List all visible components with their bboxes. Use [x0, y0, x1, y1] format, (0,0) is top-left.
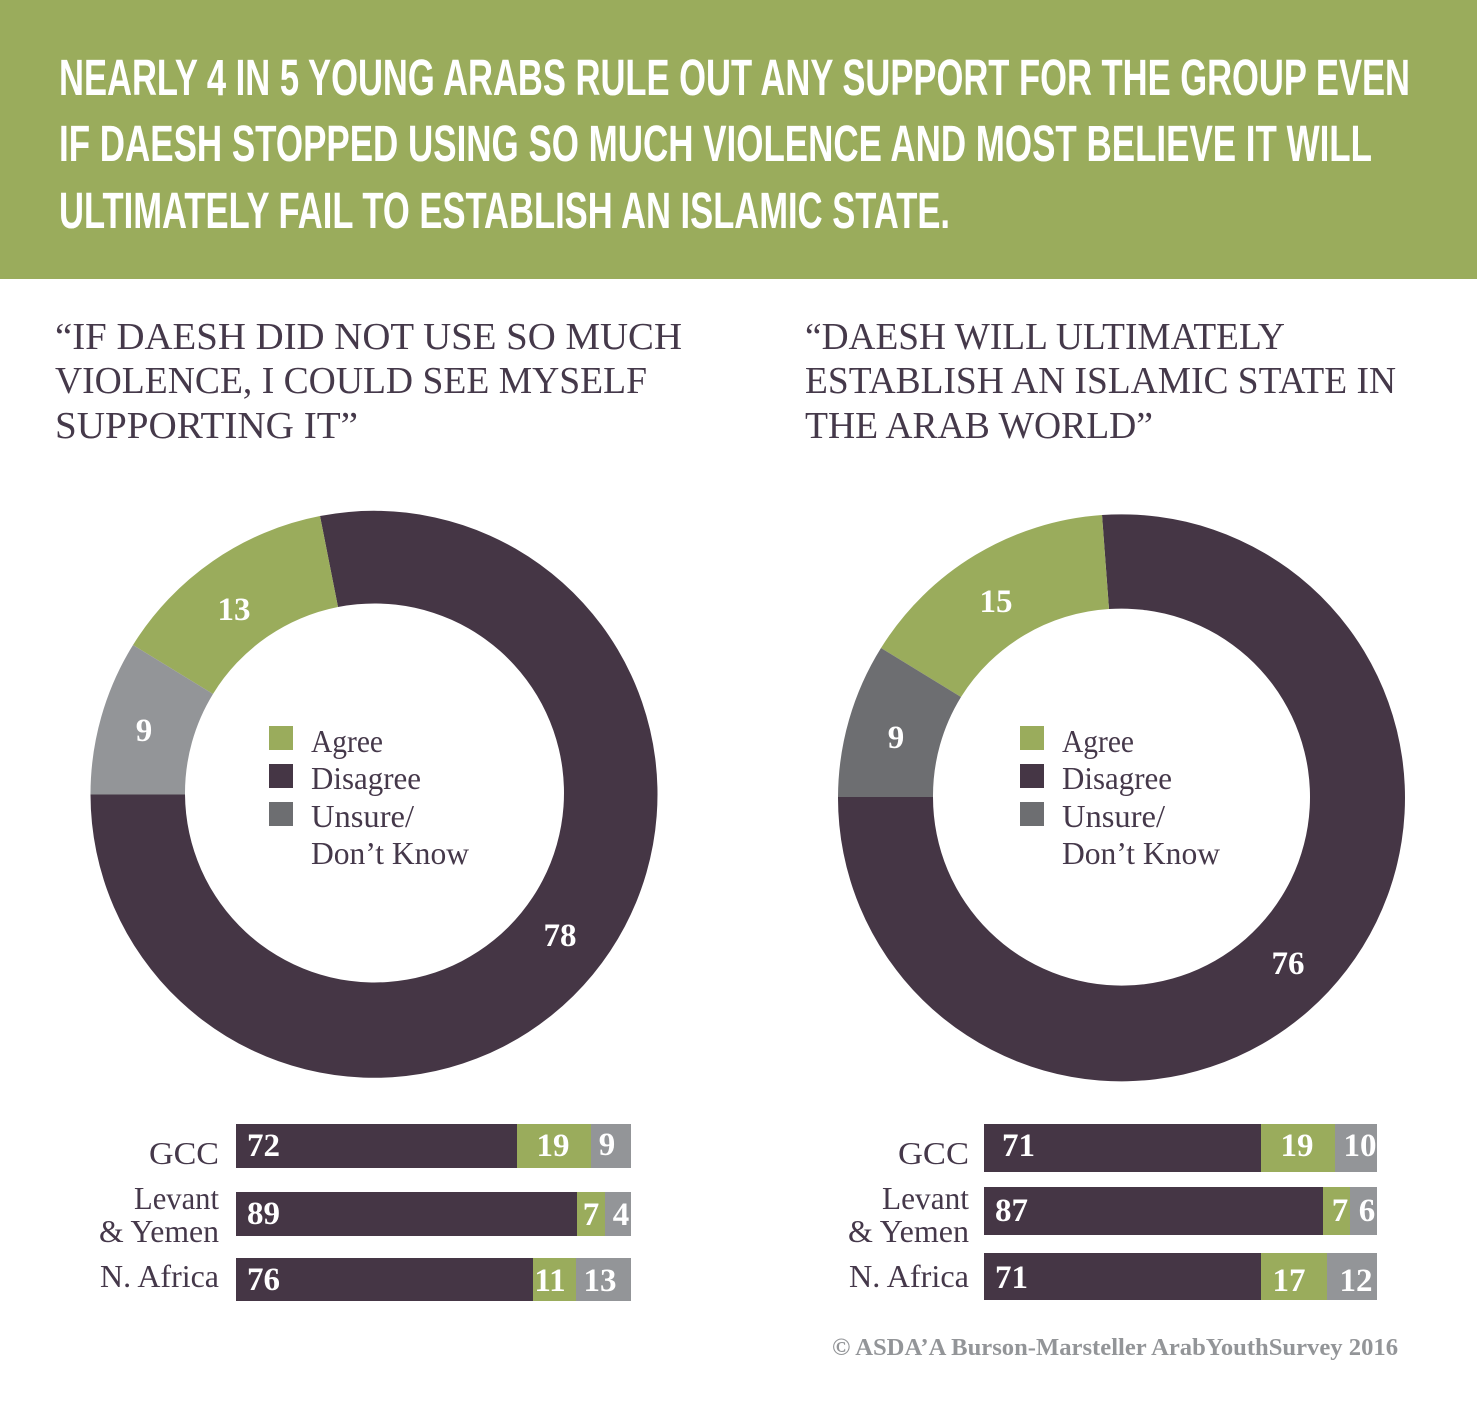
- right legend: Agree: [1062, 723, 1134, 759]
- right question heading: [805, 316, 1396, 447]
- header banner: ULTIMATELY FAIL TO ESTABLISH AN ISLAMIC STATE.: [59, 182, 950, 239]
- left bar chart: 13: [584, 1263, 616, 1299]
- right bar chart: N. Africa: [849, 1258, 969, 1294]
- right bar chart: Levant: [882, 1180, 969, 1216]
- right bar chart: 87: [995, 1193, 1028, 1229]
- right bar chart: GCC: [898, 1135, 969, 1171]
- right question heading: “DAESH WILL ULTIMATELY: [805, 316, 1285, 358]
- left donut chart: 13: [218, 592, 250, 628]
- right bar chart: 19: [1280, 1128, 1314, 1164]
- left bar chart: 76: [247, 1262, 280, 1298]
- right bar chart: 10: [1344, 1128, 1376, 1164]
- right legend: Unsure/: [1062, 798, 1165, 834]
- left question heading: [55, 316, 682, 447]
- left donut chart: 9: [136, 713, 152, 749]
- left legend: Unsure/: [311, 798, 414, 834]
- right bar chart: 71: [1002, 1128, 1035, 1164]
- right question heading: THE ARAB WORLD”: [805, 405, 1153, 447]
- right legend: [1020, 723, 1220, 871]
- right bar chart: & Yemen: [848, 1213, 969, 1249]
- left legend: Don’t Know: [311, 835, 469, 871]
- left bar chart: 7: [583, 1197, 599, 1233]
- left bar chart: & Yemen: [99, 1213, 219, 1249]
- left question heading: “IF DAESH DID NOT USE SO MUCH: [55, 316, 682, 358]
- left donut chart: 78: [544, 918, 576, 954]
- left question heading: VIOLENCE, I COULD SEE MYSELF: [55, 360, 647, 402]
- left legend: Disagree: [311, 760, 421, 796]
- left legend: Agree: [311, 723, 383, 759]
- right question heading: ESTABLISH AN ISLAMIC STATE IN: [805, 360, 1396, 402]
- right bar chart: 71: [995, 1260, 1028, 1296]
- left bar chart: 11: [534, 1263, 566, 1299]
- left question heading: SUPPORTING IT”: [55, 405, 358, 447]
- left bar chart: 89: [247, 1196, 280, 1232]
- right donut chart: 76: [1272, 946, 1304, 982]
- right donut chart: 15: [980, 584, 1012, 620]
- left bar chart: 9: [599, 1127, 615, 1163]
- right bar chart: 6: [1359, 1193, 1375, 1229]
- right donut chart: [838, 514, 1405, 1081]
- header banner: [0, 0, 1477, 279]
- right bar chart: 12: [1340, 1263, 1372, 1299]
- left bar chart: Levant: [134, 1180, 219, 1216]
- left bar chart: 19: [536, 1128, 570, 1164]
- left bar chart: N. Africa: [100, 1258, 219, 1294]
- right bar chart: 17: [1272, 1263, 1306, 1299]
- source credit: © ASDA’A Burson-Marsteller ArabYouthSurvey 2016: [832, 1335, 1398, 1361]
- right donut chart: 9: [888, 720, 904, 756]
- left bar chart: 4: [613, 1197, 629, 1233]
- left bar chart: GCC: [149, 1135, 219, 1171]
- left bar chart: 72: [247, 1128, 280, 1164]
- left donut chart: [90, 511, 657, 1078]
- right bar chart: 7: [1332, 1193, 1348, 1229]
- right legend: Disagree: [1062, 760, 1172, 796]
- left legend: [269, 723, 469, 871]
- right legend: Don’t Know: [1062, 835, 1220, 871]
- right bar chart: [848, 1124, 1377, 1300]
- left bar chart: [99, 1124, 631, 1301]
